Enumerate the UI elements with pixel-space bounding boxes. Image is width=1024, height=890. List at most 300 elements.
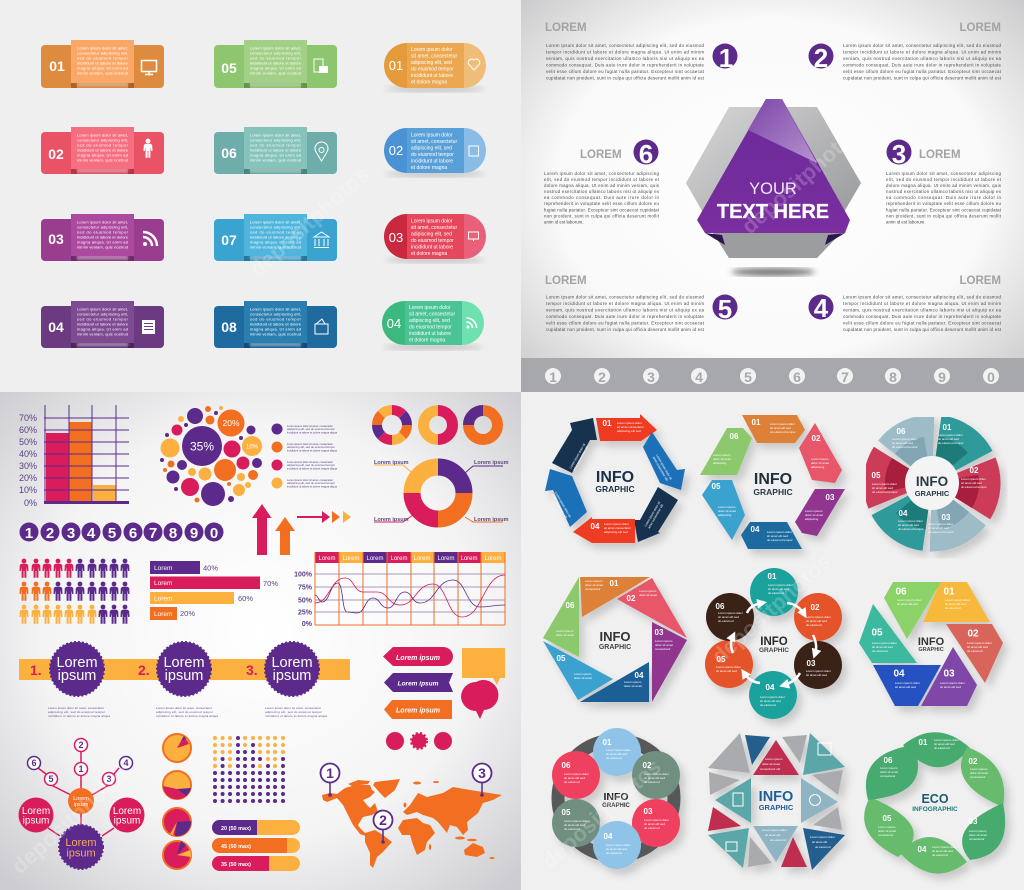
text block: middle right paragraph: nostrud exercitation ullamco laboris nisi ut aliquip ex — [886, 189, 1002, 194]
card 03: 03 — [48, 231, 64, 247]
pill 02: adipiscing elit, sed — [411, 146, 452, 152]
horizontal percent bars: Lorem — [154, 611, 172, 618]
line chart table: Lorem — [413, 556, 431, 562]
pill 01: Lorem ipsum dolor — [411, 47, 453, 53]
number circles row: 2 — [46, 525, 54, 542]
stock photo watermarks: depositphotos — [707, 549, 836, 669]
map: Australia — [464, 843, 485, 857]
text block: middle left paragraph: non proident, sunt in culpa qui officia deserunt mollit — [544, 213, 660, 218]
diagram: overlapping circles on dark ring: Lorem ipsum dolor — [564, 819, 589, 823]
bar chart: 20% — [19, 473, 37, 483]
diagram: hexagon pinwheel: INFO — [599, 629, 631, 644]
diagram: gradient hexagon segments: Lorem ipsum dolor — [895, 681, 920, 685]
card 01: 01 — [49, 58, 65, 74]
text block: middle right paragraph: non proident, sunt in culpa qui officia deserunt mollit — [886, 213, 1002, 218]
donut: eight segments — [377, 410, 407, 440]
bubble chart legend: adipiscing elit, sed do eiusmod tempor — [287, 445, 335, 449]
diagram: overlapping circles on dark ring: Lorem ipsum dolor — [644, 772, 669, 776]
label: your text here: TEXT HERE — [717, 201, 829, 223]
text block: middle left paragraph: nostrud exercitation ullamco laboris nisi ut aliquip ex — [544, 189, 660, 194]
diagram: ring with six segments: do eiusmod tempor — [898, 527, 924, 531]
diagram: overlapping circles on dark ring: Lorem ipsum dolor — [606, 843, 631, 847]
timeline banner with three badges: incididunt ut labore et dolore magna aliqua — [156, 714, 218, 718]
bubble chart legend: incididunt ut labore et dolore magna aliqua — [287, 430, 337, 434]
card 08: Lorem ipsum dolor sit amet, — [250, 306, 301, 312]
horizontal percent bars: 40% — [203, 564, 218, 572]
diagram: hexagon pinwheel: Lorem ipsum — [585, 579, 603, 583]
card 03: sed do eiusmod tempor — [77, 230, 129, 234]
text block: bottom left paragraph: velit esse cillum dolore eu fugiat nulla pariatur. Excepteur sint occaecat — [546, 320, 705, 326]
number circles row — [20, 522, 224, 542]
diagram: hexagon pinwheel: GRAPHIC — [599, 644, 631, 651]
diagram: angled hexagon segments: 05 — [712, 482, 721, 491]
card 05: 05 — [221, 60, 237, 76]
diagram: arrow hexagon cycle: adipiscing elit sed — [617, 429, 641, 433]
text block: bottom right paragraph: commodo consequat. Duis aute irure dolor in reprehenderit in voluptate — [843, 314, 1002, 319]
network diagram: Lorem — [113, 806, 141, 817]
text block: top left paragraph: veniam, quis nostrud exercitation ullamco laboris nisi ut aliquip ex ea — [546, 56, 705, 61]
card 08: minim veniam, quis nostrud — [250, 332, 301, 336]
network diagram: 3 — [106, 774, 112, 784]
diagram: angled hexagon segments: adipiscing — [805, 517, 819, 521]
diagram: six circles with arrows: INFO — [760, 636, 788, 648]
pill 01: do eiusmod tempor — [411, 66, 454, 72]
grey number strip: 0 — [987, 369, 995, 385]
line chart table: 0% — [302, 621, 313, 628]
diagram: eco leaf ring: consectetur — [969, 837, 985, 841]
text block: top right paragraph: veniam, quis nostrud exercitation ullamco laboris nisi ut aliquip ex ea — [843, 56, 1002, 61]
map: Greenland — [373, 779, 400, 798]
network diagram: 2 — [78, 740, 84, 750]
diagram: six circles with arrows: 06 — [716, 602, 725, 611]
card 04: sed do eiusmod tempor — [77, 316, 129, 322]
diagram: six circles with arrows: 05 — [717, 655, 726, 664]
number circles row: 9 — [190, 525, 198, 542]
diagram: hexagon pinwheel: Lorem ipsum — [556, 629, 574, 633]
timeline banner with three badges: incididunt ut labore et dolore magna aliqua — [265, 714, 327, 718]
diagram: gradient hexagon segments: sit amet elit sed — [967, 645, 988, 649]
pill 04: incididunt ut labore — [409, 331, 451, 337]
diagram: six circles with arrows: Lorem ipsum dolor — [768, 583, 793, 587]
bubble chart legend: adipiscing elit, sed do eiusmod tempor — [287, 427, 335, 431]
card 02: consectetur adipiscing elit, — [77, 138, 128, 142]
pill 02 — [384, 128, 486, 177]
card 08: 08 — [221, 319, 237, 335]
pill 04: 04 — [387, 316, 401, 331]
pill 02: sit amet, consectetur — [411, 139, 457, 145]
network diagram: ipsum — [66, 848, 96, 860]
pill 03: et dolore magna — [411, 251, 447, 257]
diagram: overlapping circles on dark ring: do eiusmod — [644, 826, 660, 830]
diagram: ring with six segments: 02 — [970, 466, 979, 475]
text block: top right paragraph: Lorem ipsum dolor sit amet, consectetur adipiscing elit, sed do eiusmod — [843, 43, 1002, 48]
diagram: six circles with arrows: 02 — [811, 603, 820, 612]
bubble chart legend: incididunt ut labore et dolore magna aliqua — [287, 448, 337, 452]
panel: bottom-right cycles background — [521, 392, 1024, 890]
timeline banner with three badges: adipiscing elit, sed do eiusmod tempor — [265, 710, 322, 714]
diagram: gradient hexagon segments: do eiusmod — [945, 606, 961, 610]
world map — [322, 779, 502, 868]
text block: middle left paragraph: Lorem ipsum dolor sit amet, consectetur adipiscing — [544, 171, 660, 176]
diagram: gradient hexagon segments: GRAPHIC — [918, 647, 944, 653]
number circles row: 7 — [149, 525, 157, 542]
timeline banner with three badges: ipsum — [165, 668, 203, 684]
timeline banner with three badges: adipiscing elit, sed do eiusmod tempor — [48, 710, 105, 714]
card 02: Lorem ipsum dolor sit amet, — [77, 132, 128, 138]
pill 04: sit amet, consectetur — [409, 312, 455, 318]
diagram: overlapping circles on dark ring: Lorem ipsum dolor — [644, 818, 669, 822]
big donut chart with labels: Lorem ipsum — [474, 460, 509, 466]
timeline banner with three badges: ipsum — [58, 668, 96, 684]
text block: bottom left paragraph: commodo consequat. Duis aute irure dolor in reprehenderit in voluptate — [546, 314, 705, 319]
big donut chart with labels: Lorem ipsum — [374, 460, 409, 466]
line chart table — [294, 552, 505, 628]
diagram: ring with six segments: Lorem ipsum dolor — [892, 437, 917, 441]
diagram: six circles with arrows: sit amet elit sed — [768, 587, 789, 591]
card 04: magna aliqua. Ut enim ad — [77, 326, 128, 332]
pill 04: Lorem ipsum dolor — [409, 305, 451, 311]
diagram: six circles with arrows: GRAPHIC — [759, 647, 789, 654]
panel: bottom-left charts background — [0, 392, 521, 890]
diagram: gradient hexagon segments: do eiusmod — [967, 649, 983, 653]
text block: middle right paragraph: dolore magna aliqua. Ut enim ad minim veniam, quis — [886, 183, 1002, 188]
diagram: hexagon pinwheel: dolor sit amet — [655, 643, 673, 647]
card 07: magna aliqua. Ut enim ad — [250, 240, 301, 244]
text block: middle left paragraph: reprehenderit in voluptate velit esse cillum dolore eu — [544, 201, 660, 206]
diagram: angled hexagon segments: sit amet elit sed — [770, 426, 791, 430]
diagram: gradient hexagon segments: 05 — [871, 628, 883, 638]
diagram: gradient hexagon segments: 01 — [943, 586, 955, 598]
diagram: gradient hexagon segments: Lorem ipsum dolor — [945, 598, 970, 602]
diagram: angled hexagon segments: adipiscing — [718, 513, 732, 517]
diagram: ring with six segments: sit amet elit sed — [961, 481, 982, 485]
panel: ribbon cards column 1 — [41, 40, 164, 348]
text block: top right paragraph: tempor incididunt ut labore et dolore magna aliqua. Ut enim ad minim — [843, 50, 1001, 54]
small pie charts column — [163, 734, 191, 869]
timeline banner with three badges: incididunt ut labore et dolore magna aliqua — [48, 714, 110, 718]
diagram: six circles with arrows: do eiusmod — [768, 591, 784, 595]
stock photo watermarks: depositphotos — [7, 759, 136, 879]
stock photo watermarks: depositphotos — [737, 119, 866, 239]
diagram: eco leaf ring: consectetur — [970, 775, 986, 779]
text block: top left paragraph: commodo consequat. Duis aute irure dolor in reprehenderit in voluptate — [546, 62, 705, 68]
text block: middle left paragraph: anim id est laborum. — [544, 220, 584, 224]
text block: top left paragraph: velit esse cillum dolore eu fugiat nulla pariatur. Excepteur sint occaecat — [546, 69, 705, 74]
card 05 — [214, 40, 337, 88]
heading: LOREM middle left: LOREM — [580, 149, 622, 161]
diagram: ring with six segments: 03 — [942, 513, 951, 522]
pill 02: Lorem ipsum dolor — [411, 132, 453, 138]
arrow: horizontal with chevrons — [297, 511, 351, 523]
diagram: arrow hexagon cycle: Lorem ipsum dolor — [617, 421, 642, 425]
diagram: hexagon pinwheel: dolor sit amet — [585, 583, 603, 587]
text block: middle right paragraph: fugiat nulla pariatur. Excepteur sint occaecat cupidatat — [886, 207, 1002, 212]
diagram: eco leaf ring: dolor sit amet — [880, 770, 898, 774]
card 02: sed do eiusmod tempor — [77, 142, 129, 148]
card 02: minim veniam, quis nostrud — [77, 158, 128, 162]
diagram: triangle mosaic: GRAPHIC — [759, 803, 794, 812]
diagram: angled hexagon segments: do eiusmod tempor — [770, 430, 796, 434]
diagram: arrow hexagon cycle: Lorem ipsum dolor sit — [655, 454, 673, 481]
line chart table: 50% — [298, 598, 313, 604]
card 03: magna aliqua. Ut enim ad — [77, 240, 128, 244]
diagram: eco leaf ring: Lorem ipsum — [969, 829, 987, 833]
diagram: hexagon pinwheel: dolor sit amet — [556, 633, 574, 637]
bar chart: 10% — [19, 485, 37, 495]
timeline banner with three badges: Lorem — [271, 655, 313, 671]
diagram: overlapping circles on dark ring: 06 — [562, 761, 571, 770]
horizontal percent bars: 70% — [263, 579, 278, 588]
diagram: arrow hexagon cycle: 04 — [591, 522, 600, 531]
card 07: 07 — [221, 232, 237, 248]
diagram: gradient hexagon segments: sit amet elit sed — [945, 602, 966, 606]
timeline banner with three badges: ipsum — [273, 668, 311, 684]
diagram: arrow hexagon cycle: amet consectetur elit — [551, 493, 568, 519]
card 07: sed do eiusmod tempor — [250, 230, 302, 234]
diagram: ring with six segments: sit amet elit sed — [938, 437, 959, 441]
diagram: six circles with arrows: do eiusmod — [806, 623, 822, 627]
diagram: angled hexagon segments: 04 — [751, 525, 760, 534]
network diagram: ipsum — [23, 816, 49, 826]
diagram: triangle mosaic: Lorem ipsum dolor — [762, 828, 787, 832]
label: your text here — [717, 180, 829, 223]
text block: bottom right paragraph: cupidatat non proident, sunt in culpa qui officia deserunt mollit anim id est — [843, 327, 1002, 332]
grey number strip: 7 — [841, 369, 849, 385]
diagram: arrow hexagon cycle: Lorem ipsum dolor — [604, 522, 629, 526]
number circles row: 3 — [67, 525, 75, 542]
diagram: angled hexagon segments: adipiscing — [713, 461, 727, 465]
card 06 — [214, 127, 337, 174]
diagram: gradient hexagon segments: Lorem ipsum dolor — [897, 598, 922, 602]
diagram: hexagon pinwheel: consectetur — [655, 647, 671, 651]
number badges 1 to 6: 6 — [639, 139, 653, 169]
diagram: ring with six segments: 05 — [872, 471, 881, 480]
diagram: six circles with arrows: Lorem ipsum dolor — [806, 615, 831, 619]
diagram: overlapping circles on dark ring: sit amet elit sed — [644, 776, 665, 780]
diagram: angled hexagon segments: Lorem ipsum — [811, 457, 829, 461]
diagram: six circles with arrows: do eiusmod — [718, 619, 734, 623]
diagram: angled hexagon segments: Lorem ipsum dolor — [770, 422, 795, 426]
diagram: angled hexagon segments: 03 — [826, 493, 835, 502]
card 05: minim veniam, quis nostrud — [250, 70, 301, 76]
bubble chart legend: Lorem ipsum dolor sit amet, consectetur — [287, 424, 333, 428]
text block: bottom right paragraph: velit esse cillum dolore eu fugiat nulla pariatur. Excepteur sint occaecat — [843, 320, 1002, 326]
bubble chart: 20% — [222, 418, 240, 428]
diagram: gradient hexagon segments: Lorem ipsum dolor — [872, 641, 897, 645]
diagram: six circles with arrows: sit amet elit sed — [718, 615, 739, 619]
horizontal percent bars: 60% — [238, 594, 253, 603]
diagram: ring with six segments: do eiusmod tempor — [938, 441, 964, 445]
card 07: minim veniam, quis nostrud — [250, 244, 301, 250]
diagram: six circles with arrows: 01 — [768, 572, 777, 581]
map pin 1: 1 — [326, 765, 334, 781]
diagram: eco leaf ring: sit amet elit sed — [932, 849, 953, 853]
diagram: triangle mosaic: sit amet elit — [812, 840, 827, 844]
card 03: minim veniam, quis nostrud — [77, 244, 128, 250]
diagram: angled hexagon segments: dolor sit amet — [718, 509, 736, 513]
diagram: hexagon pinwheel: dolor sit amet — [574, 676, 592, 680]
card 08: sed do eiusmod tempor — [250, 316, 302, 322]
bubble chart: 10% — [246, 444, 259, 450]
horizontal percent bars: Lorem — [154, 580, 172, 587]
diagram: triangle mosaic: do eiusmod — [815, 845, 831, 849]
card 08: magna aliqua. Ut enim ad — [250, 326, 301, 332]
diagram: angled hexagon segments: dolor sit amet — [713, 457, 731, 461]
number badges 1 to 6: 5 — [718, 294, 732, 324]
card 06: sed do eiusmod tempor — [250, 142, 302, 148]
card 02 — [41, 127, 164, 174]
network diagram — [18, 738, 144, 869]
panel: ribbon cards column 2 — [214, 40, 337, 348]
diagram: hexagon pinwheel: dolor sit amet — [639, 593, 657, 597]
pill 03: incididunt ut labore — [411, 244, 453, 250]
bubble chart legend: Lorem ipsum dolor sit amet, consectetur — [287, 442, 333, 446]
diagram: ring with six segments: 04 — [899, 509, 908, 518]
diagram: hexagon pinwheel: Lorem ipsum — [639, 589, 657, 593]
diagram: hexagon pinwheel — [543, 577, 687, 702]
diagram: arrow hexagon cycle: sit amet consectetur — [617, 425, 644, 429]
diagram: angled hexagon segments: Lorem ipsum — [805, 509, 823, 513]
number circles row: 5 — [108, 525, 116, 542]
diagram: six circles with arrows: do eiusmod — [760, 703, 776, 707]
diagram: overlapping circles on dark ring: 04 — [604, 832, 613, 841]
diagram: six circles with arrows: Lorem ipsum dolor — [760, 695, 785, 699]
diagram: ring with six segments: do eiusmod tempor — [961, 485, 987, 489]
bubble chart: 35% — [190, 440, 214, 454]
horizontal percent bars: Lorem — [154, 565, 172, 572]
timeline banner with three badges: 2. — [138, 662, 150, 678]
card 02: 02 — [48, 146, 64, 162]
timeline banner with three badges: Lorem ipsum dolor sit amet, consectetur — [156, 706, 212, 710]
diagram: ring with six segments: sit amet elit sed — [892, 441, 913, 445]
text block: middle left paragraph: elit, sed do eiusmod tempor incididunt ut labore et — [544, 177, 660, 182]
diagram: angled hexagon segments: do eiusmod tempor — [767, 538, 793, 542]
pill 03: Lorem ipsum dolor — [411, 218, 453, 224]
timeline banner with three badges — [19, 642, 350, 718]
diagram: six circles with arrows — [705, 568, 842, 719]
diagram: gradient hexagon segments: 02 — [967, 628, 979, 640]
network diagram: Lorem — [65, 837, 97, 849]
diagram: hexagon pinwheel: 04 — [635, 671, 644, 680]
network diagram: ipsum — [74, 802, 89, 808]
card 04: incididunt ut labore et dolore — [77, 322, 129, 326]
line chart table: Lorem — [318, 556, 336, 562]
pill 03: adipiscing elit, sed — [411, 232, 452, 238]
diagram: eco leaf ring: Lorem ipsum — [970, 767, 988, 771]
text block: middle right paragraph: Lorem ipsum dolor sit amet, consectetur adipiscing — [886, 171, 1002, 176]
network diagram: Lorem — [22, 806, 50, 817]
bar chart: 70% — [19, 413, 37, 423]
diagram: angled hexagon segments: Lorem ipsum dolor — [767, 530, 792, 534]
diagram: hexagon pinwheel: 03 — [655, 628, 664, 637]
diagram: eco leaf ring: Lorem ipsum dolor — [932, 845, 957, 849]
diagram: arrow hexagon cycle: sit amet consectetur — [604, 526, 631, 530]
card 08 — [214, 301, 337, 348]
text block: bottom left paragraph: tempor incididunt ut labore et dolore magna aliqua. Ut enim ad minim — [546, 301, 704, 306]
pill 02: do eiusmod tempor — [411, 152, 454, 158]
text block: top left paragraph: cupidatat non proident, sunt in culpa qui officia deserunt mollit anim id est — [546, 76, 705, 80]
grey number strip: 5 — [744, 369, 752, 385]
stock photo watermarks: depositphotos — [537, 754, 666, 874]
diagram: arrow hexagon cycle: Lorem ipsum dolor sit — [568, 442, 586, 469]
text block: top right paragraph: commodo consequat. Duis aute irure dolor in reprehenderit in voluptate — [843, 62, 1002, 68]
speech bubble: yellow square — [462, 648, 505, 685]
text block: middle right paragraph: reprehenderit in voluptate velit esse cillum dolore eu — [886, 201, 1002, 206]
text block: top right paragraph: cupidatat non proident, sunt in culpa qui officia deserunt mollit anim id est — [843, 76, 1002, 80]
diagram: eco leaf ring: do eiusmod — [934, 746, 950, 750]
arrow: crimson up — [252, 504, 272, 555]
big donut chart with labels — [374, 460, 509, 523]
number badges 1 to 6: 3 — [892, 139, 906, 169]
diagram: overlapping circles on dark ring: Lorem ipsum dolor — [606, 748, 631, 752]
card 03: incididunt ut labore et dolore — [77, 234, 129, 240]
diagram: ring with six segments — [872, 423, 987, 534]
number badges 1 to 6: 1 — [719, 43, 733, 73]
diagram: arrow hexagon cycle: amet consectetur elit — [572, 445, 589, 471]
diagram: gradient hexagon segments: 06 — [895, 586, 907, 598]
text block: top left paragraph: Lorem ipsum dolor sit amet, consectetur adipiscing elit, sed do eiusmod — [546, 43, 705, 48]
grey number strip: 9 — [938, 369, 946, 385]
text block: middle right paragraph: ea commodo consequat. Duis aute irure dolor in — [886, 195, 1002, 200]
diagram: six circles with arrows: Lorem ipsum dolor — [718, 611, 743, 615]
number circles row: 4 — [87, 525, 96, 542]
diagram: triangle mosaic: dolor sit amet — [762, 762, 780, 766]
diagram: gradient hexagon segments: 04 — [893, 668, 905, 680]
diagram: ring with six segments: Lorem ipsum dolor — [938, 433, 963, 437]
diagram: gradient hexagon segments: Lorem ipsum dolor — [940, 681, 965, 685]
ribbon tags: Lorem ipsum — [396, 708, 440, 714]
card 03 — [41, 214, 164, 261]
diagram: triangle mosaic: Lorem ipsum dolor — [810, 835, 835, 839]
text block: middle left paragraph: fugiat nulla pariatur. Excepteur sint occaecat cupidatat — [544, 207, 660, 212]
diagram: overlapping circles on dark ring: do eiusmod — [564, 780, 580, 784]
diagram: overlapping circles on dark ring: 03 — [644, 807, 653, 816]
diagram: ring with six segments: GRAPHIC — [915, 489, 950, 498]
diagram: overlapping circles on dark ring: sit amet elit sed — [606, 847, 627, 851]
diagram: triangle mosaic — [708, 733, 845, 870]
grey number strip — [521, 358, 1024, 392]
diagram: six circles with arrows: Lorem ipsum dolor — [716, 665, 741, 669]
number circles row: 1 — [25, 525, 33, 542]
card 04: Lorem ipsum dolor sit amet, — [77, 306, 128, 312]
panel: top-right hexagon background — [521, 0, 1024, 392]
diagram: hexagon pinwheel: dolor sit amet — [624, 684, 642, 688]
diagram: ring with six segments: Lorem ipsum dolor — [928, 522, 953, 526]
donut: orange with purple quarter — [468, 410, 498, 440]
timeline banner with three badges: adipiscing elit, sed do eiusmod tempor — [156, 710, 213, 714]
heading: LOREM middle right: LOREM — [919, 149, 961, 161]
diagram: eco leaf ring: 04 — [918, 845, 927, 854]
hexagon ground shadow — [731, 268, 815, 276]
diagram: angled hexagon segments: sit amet elit sed — [767, 534, 788, 538]
diagram: ring with six segments: sit amet elit sed — [898, 523, 919, 527]
card 01: minim veniam, quis nostrud — [77, 70, 128, 76]
pill 01: et dolore magna — [411, 80, 447, 86]
pill 04: et dolore magna — [409, 338, 445, 344]
card 01 — [41, 40, 164, 88]
diagram: eco leaf ring: consectetur — [880, 774, 896, 778]
progress bars: 20 (50 max) — [221, 826, 251, 832]
card 07: Lorem ipsum dolor sit amet, — [250, 220, 301, 224]
diagram: overlapping circles on dark ring: sit amet elit sed — [564, 776, 585, 780]
bubble chart legend: adipiscing elit, sed do eiusmod tempor — [287, 463, 335, 467]
bar chart: 60% — [19, 425, 37, 435]
diagram: arrow hexagon cycle — [545, 414, 685, 543]
number badges 1 to 6: 4 — [814, 293, 829, 323]
diagram: hexagon pinwheel: 02 — [627, 594, 636, 603]
line chart table: Lorem — [342, 556, 360, 562]
pill 04 — [382, 301, 484, 350]
